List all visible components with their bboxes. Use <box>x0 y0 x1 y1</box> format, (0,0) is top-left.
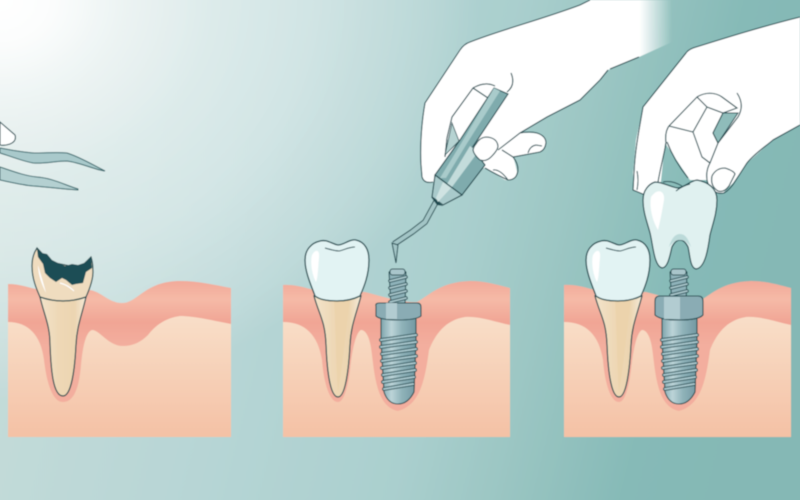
hand <box>633 17 800 195</box>
hand holding crown <box>633 17 800 195</box>
gum and bone tissue <box>564 281 791 437</box>
dental tool <box>392 88 508 263</box>
gum and bone tissue <box>8 281 231 437</box>
panel: implant placement <box>283 240 510 437</box>
implant collar <box>655 296 703 320</box>
healthy tooth <box>305 240 369 397</box>
panel: extraction of decayed tooth <box>8 248 231 437</box>
thumb <box>473 137 498 161</box>
hand <box>421 0 672 182</box>
decay <box>37 249 92 285</box>
implant <box>376 269 421 404</box>
crown tooth <box>643 180 717 269</box>
hand holding dental tool <box>392 0 672 263</box>
gum and bone tissue <box>283 281 510 437</box>
decayed tooth <box>32 248 93 396</box>
icon: finger and tweezers <box>0 122 105 190</box>
thumb nail <box>712 168 735 191</box>
implant <box>657 269 702 404</box>
healthy tooth <box>586 240 650 397</box>
panel: crown placement <box>564 240 791 437</box>
